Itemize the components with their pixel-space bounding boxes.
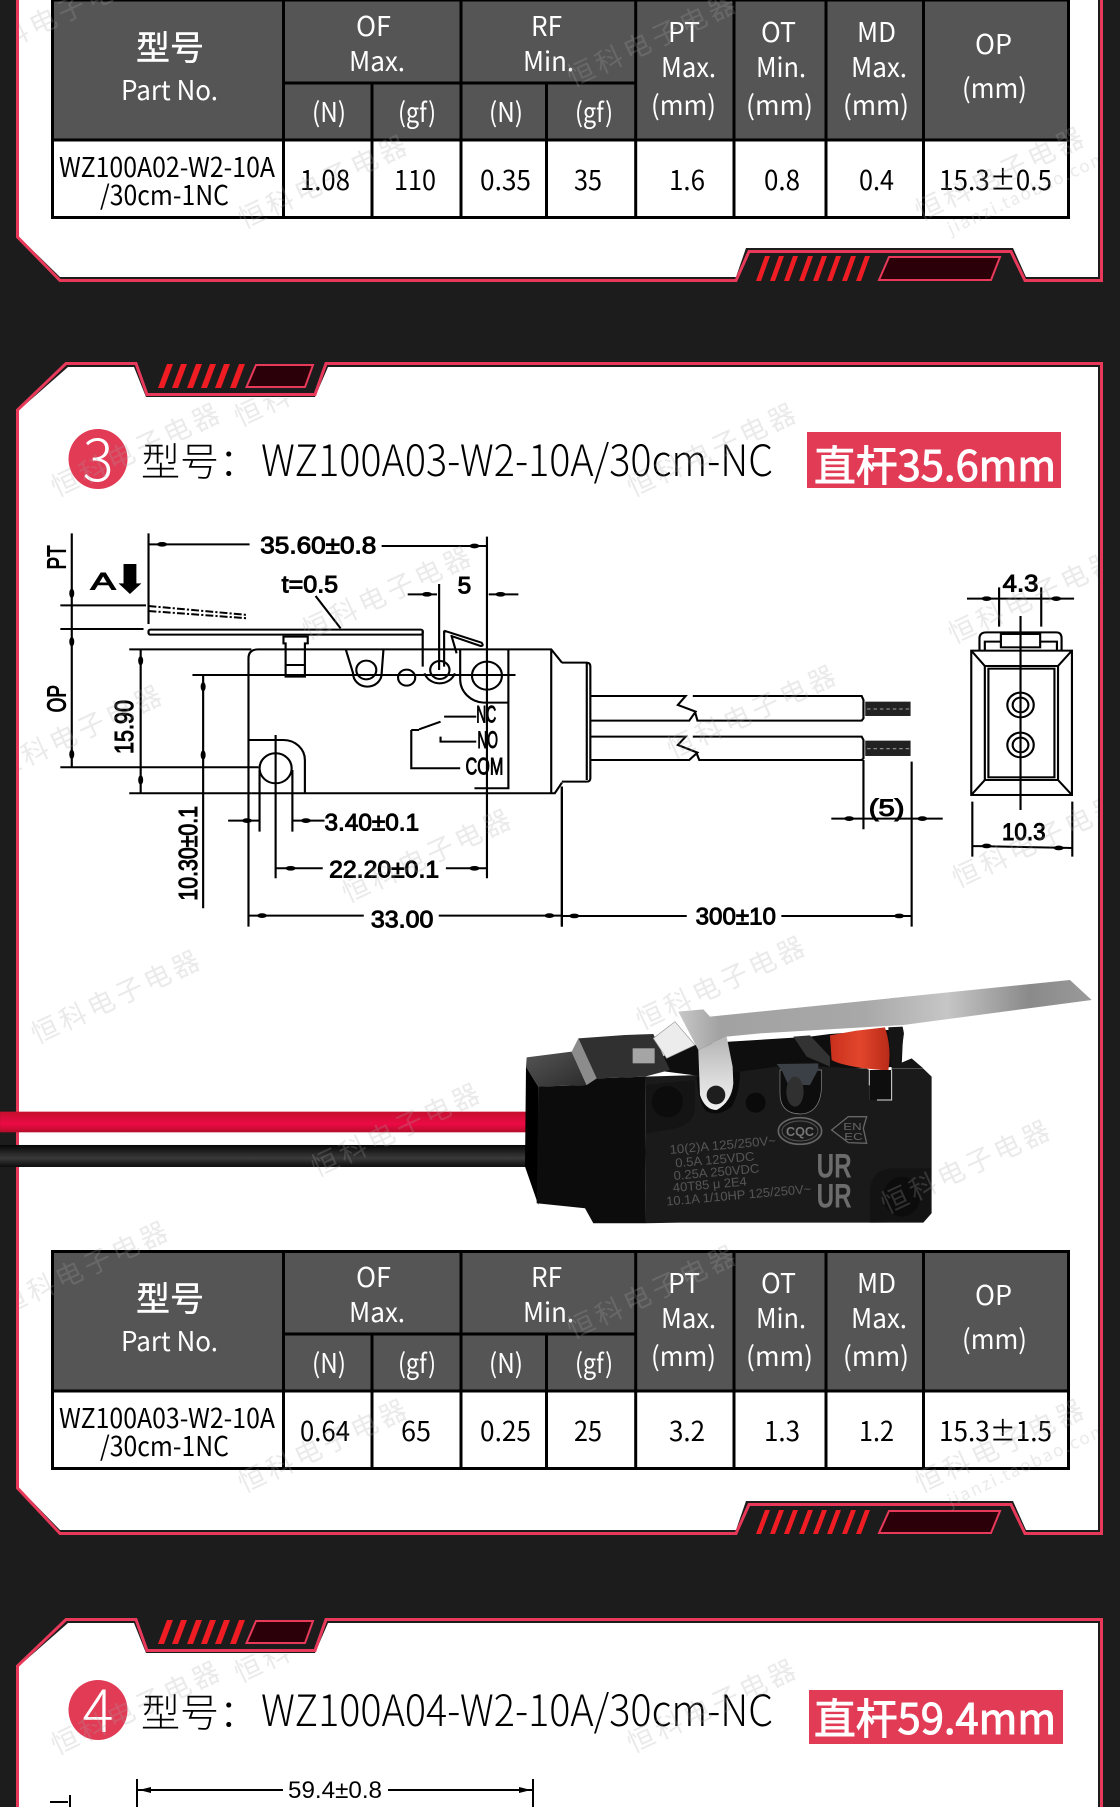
bottom tab stripes [756,1510,870,1534]
connector front [537,1077,646,1223]
flange [562,663,590,782]
bottom tab stripes [756,256,870,281]
UR marks [817,1147,852,1215]
header text: (N) [489,91,523,130]
data row [59,146,1052,213]
dimension drawing: wires and side view: (5) [869,795,905,822]
header text: OF [356,5,391,44]
top tab box [246,365,313,387]
product photo: micro switch with wires [0,980,1092,1223]
number 4: 4 [82,1665,114,1749]
header text: OP [975,1274,1012,1313]
watermarks: 恒科电子电器 [231,1387,416,1501]
watermarks: 恒科电子电器 [335,797,520,911]
arrowheads [69,542,554,918]
left hole [652,1086,683,1117]
header text: OP [975,23,1012,62]
dimension drawing: front view [43,532,562,933]
data row: /30cm-1NC [100,1425,229,1464]
header text: Max. [349,40,405,79]
switch body outline [248,649,562,793]
CQC mark [778,1118,822,1144]
dimension drawing: front view: 10.30±0.1 [174,806,203,901]
header text: Max. [851,46,907,85]
wire dimension text: 300±10 [696,903,776,930]
number badge 3 [68,429,128,489]
watermarks: 恒科电子电器 [660,653,845,767]
dimension text: 35.60±0.8 [260,532,376,559]
table: model 2 specifications [51,0,1070,218]
header text: RF [531,5,562,44]
rating text: 0.25A 250VDC [673,1162,760,1183]
header text: PT [668,1262,700,1301]
header text: Max. [661,46,716,85]
header text: MD [857,11,896,50]
circuit symbol: COM [466,753,503,780]
watermarks: 恒科电子电器 [44,391,229,505]
connector light bevel [572,1038,597,1085]
header text: Max. [851,1297,907,1336]
header text: (mm) [746,1335,813,1374]
black wire [0,1145,527,1167]
dimension drawing: front view: 3.40±0.1 [325,809,419,836]
EN mark [832,1117,867,1143]
seal window [633,1048,655,1063]
header text: (mm) [962,1318,1027,1357]
UR marks: UR [817,1147,852,1185]
watermarks: 恒科电子电器 [231,123,416,237]
header text: Min. [523,1291,574,1330]
watermarks: 恒科电子电器 [560,1233,745,1347]
number badge 4 [68,1680,128,1740]
arrowheads [139,1787,531,1793]
header text: Min. [523,40,574,79]
header text: Max. [349,1291,405,1330]
watermarks: 恒科电子电器 [874,1108,1059,1222]
header text: (N) [312,1342,346,1381]
panel: top section (model 2) [18,0,1102,281]
strand highlights [867,709,909,749]
panel: model 4 [18,1620,1102,1807]
header text: Min. [756,46,806,85]
plunger block [777,1063,818,1085]
watermarks: 恒科电子电器 [629,924,814,1038]
panel border [18,1620,1102,1807]
dimension drawing: front view: 5 [458,572,471,599]
rating text: 0.5A 125VDC [675,1149,755,1170]
model label: 型号： [141,432,258,488]
dimension drawing: front view: OP [43,685,72,712]
header text: Min. [756,1297,806,1336]
header text: 型号 [136,1272,204,1321]
panel: model 3 [18,364,1102,1534]
rating text: 40T85 μ 2E4 [672,1175,747,1195]
dimension lines [60,533,562,927]
lever side flange [653,1022,695,1058]
dimension value: 59.4±0.8 [288,1777,382,1804]
corner hole [883,1177,920,1217]
data row: 0.8 [764,159,800,198]
lever blade [678,980,1092,1050]
panel border [18,364,1102,1534]
watermarks: 恒科电子电器 [24,938,209,1052]
press direction arrow A: A [91,568,116,595]
header text: (gf) [575,1342,613,1381]
side view [967,587,1074,857]
header text: (gf) [575,91,613,130]
header text: (gf) [398,1342,436,1381]
red button [830,1027,890,1071]
data row: 35 [574,159,602,198]
holes [260,661,502,783]
dimension drawing: front view: 15.90 [110,700,139,754]
data row: 3.2 [669,1410,705,1449]
EN mark: EN [843,1122,862,1133]
model label: 型号： [141,1683,258,1739]
header text: (mm) [843,1335,909,1374]
watermark fragment below model 3 tab: 恒科 [227,373,299,434]
data row: /30cm-1NC [100,174,229,213]
data row: 25 [574,1410,602,1449]
bottom tab box [879,257,1000,280]
panel border [18,0,1102,280]
watermarks: 恒科电子电器 [908,1387,1093,1501]
top tab stripes [158,1620,245,1644]
length badge [807,432,1061,488]
header text: OT [761,11,796,50]
length badge text: 直杆59.4mm [814,1686,1056,1747]
red wire [0,1112,527,1132]
watermarks: 恒科电子电器 [44,1649,229,1763]
rating text: 10(2)A 125/250V~ [669,1134,776,1157]
header text [121,1256,1027,1381]
corner bump [870,1168,931,1223]
EN mark: EC [844,1132,863,1143]
circuit symbol: NO [477,727,498,754]
header text: (gf) [398,91,436,130]
lever arm [698,1037,733,1110]
wires [590,696,863,760]
switch back wall [653,1030,903,1076]
data row: 0.35 [480,159,531,198]
plunger arch [780,1070,822,1114]
plunger pin [786,1077,804,1107]
rating text: 10.1A 1/10HP 125/250V~ [666,1182,812,1209]
upper step [578,1034,670,1078]
connector top face [526,1052,587,1087]
watermark fragment below model 4 tab: 恒科 [227,1629,299,1690]
header text: (mm) [746,84,813,123]
data row: 0.25 [480,1410,531,1449]
dimension drawing: front view: 22.20±0.1 [329,856,439,883]
length badge text: 直杆35.6mm [814,433,1056,494]
watermarks: 恒科电子电器 [620,391,805,505]
data row: 0.4 [859,159,894,198]
lever pocket [697,1072,740,1113]
stripped wire ends [865,702,911,756]
table: model 3 specifications [51,1251,1070,1468]
header text: OT [761,1262,796,1301]
dimension drawing: model 4 (cropped) [50,1777,533,1807]
watermarks: 恒科电子电器 [620,1647,805,1761]
top tab box [246,1621,313,1643]
plunger [283,637,308,677]
header text: Part No. [121,1320,218,1359]
header text: (mm) [651,84,716,123]
header text: Part No. [121,69,218,108]
notch [869,1070,892,1100]
inner bevel [793,1035,830,1067]
header text: OF [356,1256,391,1295]
header text [121,5,1027,130]
header text: 型号 [136,21,204,70]
data row: 15.3±0.5 [939,159,1052,198]
watermarks: jianzi.taobao.com [942,143,1111,240]
arrowheads [982,596,1064,850]
heading: model 4 [68,1665,1063,1749]
dimension drawing: wires and side view [562,570,1074,930]
header text: MD [857,1262,896,1301]
data row: 65 [401,1410,431,1449]
right guide [888,1027,923,1068]
lever pivot [707,1086,725,1104]
UR marks: UR [817,1177,852,1215]
watermarks: 恒科电子电器 [908,115,1093,229]
circuit symbol: NC [476,701,496,728]
watermarks: 恒科电子电器 [295,534,480,648]
header text: (mm) [843,84,909,123]
small hole [746,1093,766,1113]
header text: (N) [489,1342,523,1381]
header text: (mm) [651,1335,716,1374]
bottom tab box [879,1511,1000,1533]
model number: WZ100A03-W2-10A/30cm-NC [261,427,773,489]
heading: model 3 [68,414,1061,498]
main body face [645,1067,932,1223]
watermarks: jianzi.taobao.com [942,1415,1111,1512]
top tab stripes [158,364,245,388]
lever [149,606,483,667]
CQC mark: CQC [786,1124,814,1139]
data row: 110 [394,159,436,198]
dimension drawing: front view: t=0.5 [282,571,338,598]
dimension drawing: front view: PT [43,545,72,569]
model number: WZ100A04-W2-10A/30cm-NC [261,1677,773,1739]
data row [59,1397,1052,1464]
side view dimension text: 4.3 [1003,570,1038,597]
watermarks: 恒科电子电器 [304,1071,489,1185]
circuit symbol [411,701,503,780]
data row: WZ100A02-W2-10A [59,146,276,185]
data row: 1.3 [764,1410,800,1449]
body recess [646,1080,695,1133]
header text: RF [531,1256,562,1295]
wire dimensions [562,760,943,927]
arrowheads [569,816,927,918]
header text: Max. [661,1297,716,1336]
data row: 0.64 [300,1410,350,1449]
header text: (mm) [962,67,1027,106]
length badge [809,1690,1063,1744]
data row: 1.08 [300,159,350,198]
press direction arrow A [91,564,141,595]
data row: 1.2 [859,1410,894,1449]
left connector side [525,1067,538,1205]
dimension drawing: wires and side view: 10.3 [1002,819,1046,846]
header text: PT [668,11,700,50]
data row: 15.3±1.5 [939,1410,1052,1449]
data row: 1.6 [669,159,705,198]
rating text [666,1134,812,1209]
header text: (N) [312,91,346,130]
number 3: 3 [82,414,114,498]
dimension drawing: front view: 33.00 [371,906,433,933]
data row: WZ100A03-W2-10A [59,1397,276,1436]
